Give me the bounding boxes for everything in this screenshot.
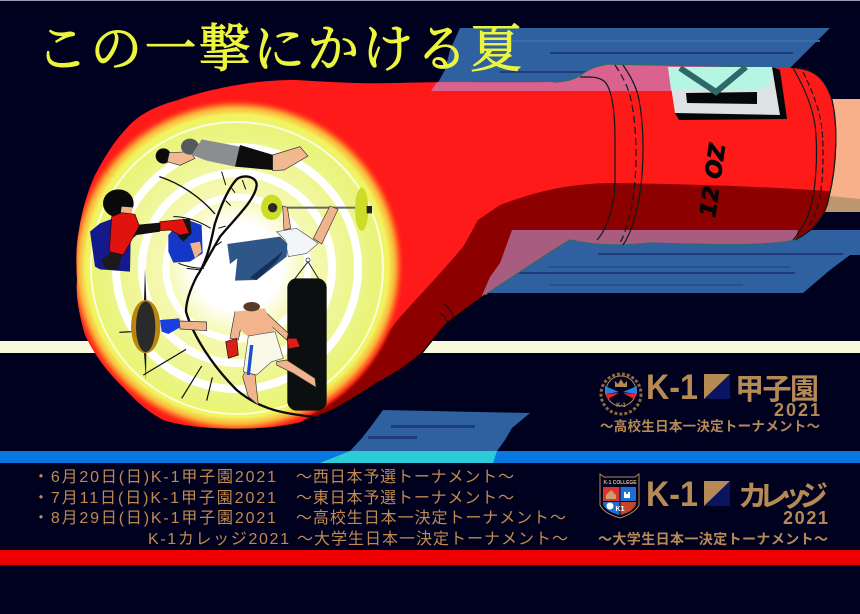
year: 2021 bbox=[783, 508, 828, 528]
glove size text: 12 OZ bbox=[696, 141, 731, 219]
icon: college shield: K-1 COLLEGE bbox=[604, 480, 637, 486]
icon: college shield: K1 bbox=[616, 506, 625, 513]
illustration figures bbox=[90, 139, 372, 417]
knuckle creases bbox=[440, 304, 455, 325]
glove shadow bbox=[300, 183, 840, 440]
year: 2021 bbox=[774, 400, 820, 420]
schedule row 1 bbox=[33, 468, 514, 486]
figure: speed bag bbox=[131, 268, 207, 380]
koshien subtitle: 〜高校生日本一決定トーナメント〜 bbox=[600, 418, 820, 434]
figure: heavy bag bbox=[287, 258, 327, 411]
blur overlay bottom bbox=[480, 230, 798, 300]
boxing glove bbox=[76, 63, 836, 429]
glow circle bbox=[69, 98, 405, 434]
schedule row 3 bbox=[33, 509, 566, 527]
schedule row 2: ・7月11日(日)K-1甲子園2021 bbox=[33, 489, 276, 507]
college subtitle: 〜大学生日本一決定トーナメント〜 bbox=[598, 531, 828, 547]
schedule row 4: 〜大学生日本一決定トーナメント〜 bbox=[297, 530, 568, 548]
schedule row 1: 〜西日本予選トーナメント〜 bbox=[296, 468, 514, 486]
icon: college shield bbox=[600, 474, 639, 518]
figure: ab roller bbox=[156, 139, 308, 171]
figure: bench press bbox=[227, 188, 372, 281]
title: この一撃にかける夏 bbox=[36, 7, 522, 82]
ripple rings bbox=[91, 122, 383, 414]
schedule row 1: ・6月20日(日)K-1甲子園2021 bbox=[33, 468, 276, 486]
impact shockwave lines bbox=[119, 172, 313, 417]
figure: boxer kicking bag bbox=[226, 302, 316, 405]
schedule row 4: K-1カレッジ2021 bbox=[148, 531, 289, 548]
glove body bbox=[76, 67, 836, 429]
glove outline top bbox=[553, 64, 777, 82]
schedule row 2: 〜東日本予選トーナメント〜 bbox=[296, 489, 514, 507]
top edge line bbox=[0, 0, 860, 1]
blur overlay top bbox=[431, 64, 726, 91]
lower motion blur patch bbox=[350, 410, 530, 451]
schedule row 4 bbox=[148, 530, 568, 548]
figure: boxer punching bbox=[90, 189, 203, 272]
icon: split square bbox=[704, 481, 730, 506]
schedule row 2 bbox=[33, 489, 514, 507]
schedule row 3: ・8月29日(日)K-1甲子園2021 bbox=[33, 509, 276, 527]
glove outline lower edge bbox=[255, 295, 485, 428]
schedule text bbox=[33, 468, 568, 548]
glove label bbox=[668, 67, 787, 120]
upper motion blur band bbox=[431, 28, 830, 95]
icon: koshien emblem: K-1 bbox=[616, 403, 626, 409]
koshien wordmark: 甲子園 bbox=[735, 374, 819, 406]
glove outline right bbox=[795, 68, 836, 240]
red stripe bbox=[0, 550, 860, 565]
forearm bbox=[825, 99, 860, 212]
K-1 wordmark: K-1 bbox=[646, 475, 698, 514]
glove outline bottom bbox=[485, 240, 795, 295]
K-1 College logo bbox=[598, 474, 828, 547]
K-1 wordmark: K-1 bbox=[646, 368, 698, 407]
left cuff seams bbox=[580, 65, 643, 245]
schedule row 3: 〜高校生日本一決定トーナメント〜 bbox=[296, 509, 566, 527]
right cuff seams bbox=[793, 68, 823, 240]
lower motion blur band bbox=[480, 230, 860, 293]
cream stripe bbox=[0, 341, 860, 353]
K-1 Koshien logo bbox=[600, 368, 820, 434]
blue stripe bbox=[0, 451, 860, 463]
college wordmark: カレッジ bbox=[738, 481, 828, 513]
icon: split square bbox=[704, 374, 730, 399]
icon: koshien emblem bbox=[601, 374, 641, 414]
